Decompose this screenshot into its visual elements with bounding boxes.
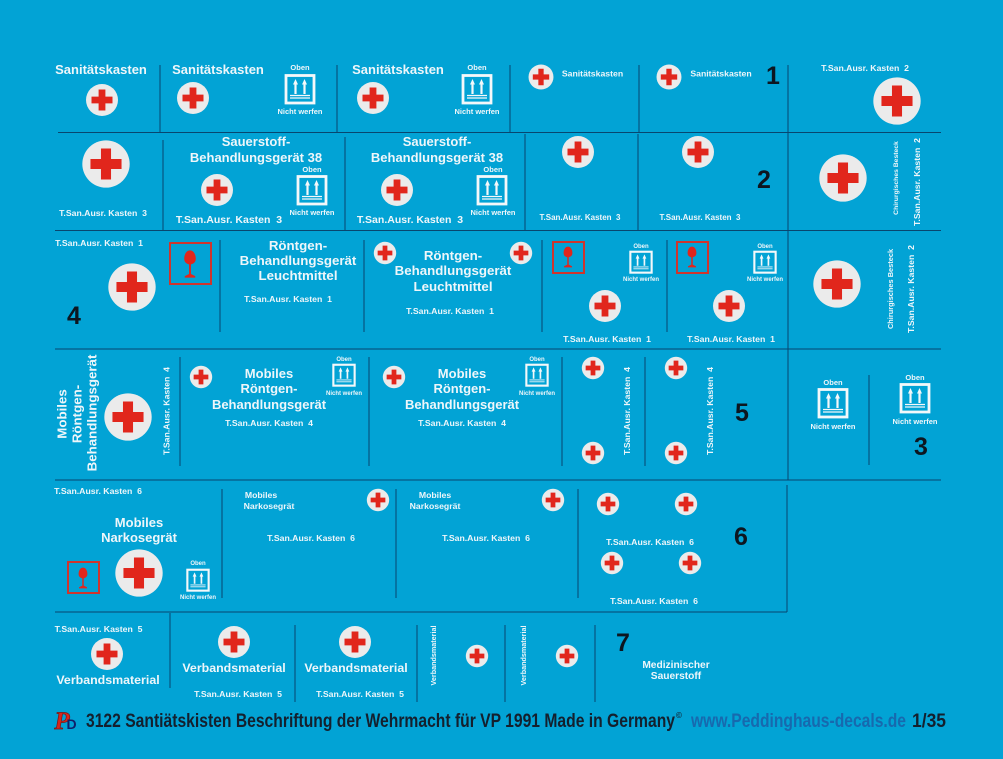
label: T.San.Ausr. Kasten 1: T.San.Ausr. Kasten 1 xyxy=(244,294,332,304)
label: T.San.Ausr. Kasten 4: T.San.Ausr. Kasten 4 xyxy=(225,418,313,428)
label: Nicht werfen: Nicht werfen xyxy=(326,391,362,397)
label: Mobiles: Mobiles xyxy=(419,490,451,500)
icon: small red cross xyxy=(597,493,619,515)
number 5: 5 xyxy=(735,399,749,427)
label: Sanitätskasten 1: Sanitätskasten xyxy=(55,62,147,77)
label: Behandlungsgerät: Behandlungsgerät xyxy=(240,253,357,268)
icon: arrows up box xyxy=(286,76,314,103)
icon: red cross xyxy=(357,82,389,114)
icon: red cross small xyxy=(657,65,681,89)
icon: fragile glass box xyxy=(677,242,708,273)
icon: fragile glass box xyxy=(170,243,211,284)
label: Leuchtmittel: Leuchtmittel xyxy=(413,279,493,294)
icon: arrows up box xyxy=(901,384,929,412)
label: T.San.Ausr. Kasten 1: T.San.Ausr. Kasten 1 xyxy=(687,334,775,344)
icon: small red cross xyxy=(190,366,212,388)
icon: red cross xyxy=(339,626,371,658)
icon: red cross xyxy=(91,638,123,670)
number 6: 6 xyxy=(734,523,748,551)
label: Nicht werfen: Nicht werfen xyxy=(454,107,500,116)
label: Oben: Oben xyxy=(290,63,310,72)
label: T.San.Ausr. Kasten 5: T.San.Ausr. Kasten 5 xyxy=(316,689,404,699)
label: Narkosegrät: Narkosegrät xyxy=(101,530,178,545)
label: Nicht werfen: Nicht werfen xyxy=(810,422,856,431)
label: Medizinischer: Medizinischer xyxy=(642,660,710,671)
label: Verbandsmaterial vertical: Verbandsmaterial xyxy=(519,626,528,685)
logo: PD: P xyxy=(53,708,70,735)
label: Mobiles: Mobiles xyxy=(245,490,277,500)
icon: arrows up box xyxy=(630,252,652,273)
label: Oben: Oben xyxy=(190,561,206,567)
icon: fragile glass box xyxy=(553,242,584,273)
label: T.San.Ausr. Kasten 4 vertical: T.San.Ausr. Kasten 4 xyxy=(622,367,632,455)
label: Röntgen: Röntgen- xyxy=(240,381,298,396)
icon: red cross xyxy=(381,174,413,206)
product title: 3122 Santiätskisten Beschriftung der Wehrmacht für VP 1991 Made in Germany xyxy=(86,711,675,732)
label: T.San.Ausr. Kasten 3: T.San.Ausr. Kasten 3 xyxy=(660,213,741,222)
label: T.San.Ausr. Kasten 6: T.San.Ausr. Kasten 6 xyxy=(610,596,698,606)
label: T.San.Ausr. Kasten 5: T.San.Ausr. Kasten 5 xyxy=(194,689,282,699)
label: Oben: Oben xyxy=(336,357,352,363)
label: Oben: Oben xyxy=(467,63,487,72)
scale: 1/35 xyxy=(912,711,946,732)
label: T.San.Ausr. Kasten 4 vertical: T.San.Ausr. Kasten 4 xyxy=(162,367,172,455)
label: Narkosegrät: Narkosegrät xyxy=(410,501,460,511)
icon: small red cross xyxy=(510,242,532,264)
label: Chirurgisches Besteck: Chirurgisches Besteck xyxy=(893,141,900,215)
icon: large red cross xyxy=(82,140,130,188)
icon: arrows up box xyxy=(333,365,355,386)
label: Mobiles: Mobiles xyxy=(438,366,486,381)
icon: arrows up box xyxy=(298,176,326,204)
label: Behandlungsgerät: Behandlungsgerät xyxy=(395,263,512,278)
logo: PD xyxy=(53,708,77,735)
label: T.San.Ausr. Kasten 6: T.San.Ausr. Kasten 6 xyxy=(267,533,355,543)
footer xyxy=(53,708,946,735)
icon: small red cross xyxy=(367,489,389,511)
icon: small red cross xyxy=(383,366,405,388)
label: Röntgen vertical: Röntgen- xyxy=(70,385,84,443)
label: Nicht werfen: Nicht werfen xyxy=(519,391,555,397)
label: Röntgen block: Röntgen- xyxy=(269,238,327,253)
label: T.San.Ausr. Kasten 3: T.San.Ausr. Kasten 3 xyxy=(540,213,621,222)
panel: row 3 xyxy=(55,238,783,344)
label: Sanitätskasten small: Sanitätskasten xyxy=(690,68,752,78)
label: Verbandsmaterial vertical: Verbandsmaterial xyxy=(429,626,438,685)
icon: red cross xyxy=(177,82,209,114)
label: Oben: Oben xyxy=(823,378,843,387)
icon: arrows up box xyxy=(478,176,506,204)
panel: row 4 xyxy=(54,354,749,471)
label: Verbandsmaterial: Verbandsmaterial xyxy=(56,673,160,687)
icon: large red cross xyxy=(873,77,921,125)
icon: red cross xyxy=(562,136,594,168)
label: Oben: Oben xyxy=(302,165,322,174)
label: Sanitätskasten 2: Sanitätskasten xyxy=(172,62,264,77)
label: Narkosegrät: Narkosegrät xyxy=(244,501,294,511)
label: Oben: Oben xyxy=(757,244,773,250)
icon: red cross xyxy=(589,290,621,322)
label: Sanitätskasten 3: Sanitätskasten xyxy=(352,62,444,77)
grid lines xyxy=(55,65,941,702)
icon: arrows up box xyxy=(526,365,548,386)
label: Verbandsmaterial: Verbandsmaterial xyxy=(304,661,408,675)
label: Behandlungsgerät: Behandlungsgerät xyxy=(405,397,520,412)
label: Leuchtmittel: Leuchtmittel xyxy=(258,268,338,283)
label: Nicht werfen: Nicht werfen xyxy=(623,277,659,283)
panel: row 2 xyxy=(59,134,771,226)
icon: small red cross xyxy=(466,645,488,667)
number 4: 4 xyxy=(67,302,81,330)
label: T.San.Ausr. Kasten 1: T.San.Ausr. Kasten 1 xyxy=(55,238,143,248)
icon: small red cross xyxy=(556,645,578,667)
label: Verbandsmaterial: Verbandsmaterial xyxy=(182,661,286,675)
icon: small red cross xyxy=(601,552,623,574)
label: T.San.Ausr. Kasten 3: T.San.Ausr. Kasten 3 xyxy=(59,208,147,218)
copyright mark: © xyxy=(676,711,682,720)
icon: small red cross xyxy=(374,242,396,264)
label: T.San.Ausr. Kasten 6: T.San.Ausr. Kasten 6 xyxy=(442,533,530,543)
label: Oben: Oben xyxy=(633,244,649,250)
label: T.San.Ausr. Kasten 3: T.San.Ausr. Kasten 3 xyxy=(357,214,463,226)
label: T.San.Ausr. Kasten 1: T.San.Ausr. Kasten 1 xyxy=(406,306,494,316)
number 3: 3 xyxy=(914,433,928,461)
label: Sanitätskasten small: Sanitätskasten xyxy=(562,68,623,78)
label: Mobiles: Mobiles xyxy=(115,515,163,530)
icon: red cross xyxy=(713,290,745,322)
label: T.San.Ausr. Kasten 2 vertical: T.San.Ausr. Kasten 2 xyxy=(906,245,916,333)
label: Sauerstoff: Sauerstoff xyxy=(651,671,702,682)
label: Mobiles vertical: Mobiles xyxy=(54,389,70,439)
icon: small red cross xyxy=(665,442,687,464)
panel: row 6 xyxy=(55,624,710,699)
label: T.San.Ausr. Kasten 5: T.San.Ausr. Kasten 5 xyxy=(55,624,143,634)
label: Oben: Oben xyxy=(529,357,545,363)
label: Mobiles: Mobiles xyxy=(245,366,293,381)
label: Röntgen: Röntgen- xyxy=(433,381,491,396)
label: T.San.Ausr. Kasten 6: T.San.Ausr. Kasten 6 xyxy=(606,537,694,547)
icon: arrows up box xyxy=(463,76,491,103)
icon: small red cross xyxy=(542,489,564,511)
label: T.San.Ausr. Kasten 1: T.San.Ausr. Kasten 1 xyxy=(563,334,651,344)
label: Nicht werfen: Nicht werfen xyxy=(180,595,216,601)
icon: small red cross xyxy=(582,442,604,464)
icon: small red cross xyxy=(679,552,701,574)
panel: row 1 xyxy=(55,62,780,116)
icon: arrows up box xyxy=(187,570,209,591)
icon: fragile glass box xyxy=(68,562,99,593)
label: Behandlungsgerät vertical: Behandlungsgerät xyxy=(84,354,100,471)
icon: large red cross xyxy=(115,549,163,597)
icon: small red cross xyxy=(675,493,697,515)
label: Nicht werfen: Nicht werfen xyxy=(470,208,516,217)
label: Behandlungsgerät: Behandlungsgerät xyxy=(212,397,327,412)
icon: red cross xyxy=(218,626,250,658)
number 7: 7 xyxy=(616,629,630,657)
icon: arrows up box xyxy=(819,390,847,417)
icon: large red cross xyxy=(108,263,156,311)
label: T.San.Ausr. Kasten 4 vertical: T.San.Ausr. Kasten 4 xyxy=(705,367,715,455)
label: Sauerstoff heading: Sauerstoff- xyxy=(222,134,290,149)
label: Nicht werfen: Nicht werfen xyxy=(747,277,783,283)
icon: red cross xyxy=(201,174,233,206)
label: Chirurgisches Besteck: Chirurgisches Besteck xyxy=(886,248,895,329)
label: Nicht werfen: Nicht werfen xyxy=(289,208,335,217)
number 1: 1 xyxy=(766,62,780,90)
label: Röntgen block: Röntgen- xyxy=(424,248,482,263)
label: Sauerstoff heading: Sauerstoff- xyxy=(403,134,471,149)
label: Behandlungsgerät 38: Behandlungsgerät 38 xyxy=(190,150,322,165)
label: Behandlungsgerät 38: Behandlungsgerät 38 xyxy=(371,150,503,165)
label: T.San.Ausr. Kasten 2: T.San.Ausr. Kasten 2 xyxy=(821,63,909,73)
number 2: 2 xyxy=(757,166,771,194)
label: T.San.Ausr. Kasten 3: T.San.Ausr. Kasten 3 xyxy=(176,214,282,226)
panel: right column xyxy=(810,63,938,461)
icon: small red cross xyxy=(582,357,604,379)
icon: large red cross xyxy=(813,260,861,308)
logo: PD: D xyxy=(66,716,77,732)
icon: red cross xyxy=(682,136,714,168)
label: Nicht werfen: Nicht werfen xyxy=(892,417,938,426)
icon: arrows up box xyxy=(754,252,776,273)
icon: small red cross xyxy=(665,357,687,379)
icon: large red cross xyxy=(819,154,867,202)
icon: red cross xyxy=(86,84,118,116)
label: T.San.Ausr. Kasten 4: T.San.Ausr. Kasten 4 xyxy=(418,418,506,428)
panel: row 5 xyxy=(54,486,748,606)
label: Oben: Oben xyxy=(905,373,925,382)
icon: red cross small xyxy=(529,65,553,89)
icon: large red cross xyxy=(104,393,152,441)
label: T.San.Ausr. Kasten 6: T.San.Ausr. Kasten 6 xyxy=(54,486,142,496)
label: Oben: Oben xyxy=(483,165,503,174)
website: www.Peddinghaus-decals.de xyxy=(690,711,906,732)
label: T.San.Ausr. Kasten 2 vertical: T.San.Ausr. Kasten 2 xyxy=(912,138,922,226)
label: Nicht werfen: Nicht werfen xyxy=(277,107,323,116)
